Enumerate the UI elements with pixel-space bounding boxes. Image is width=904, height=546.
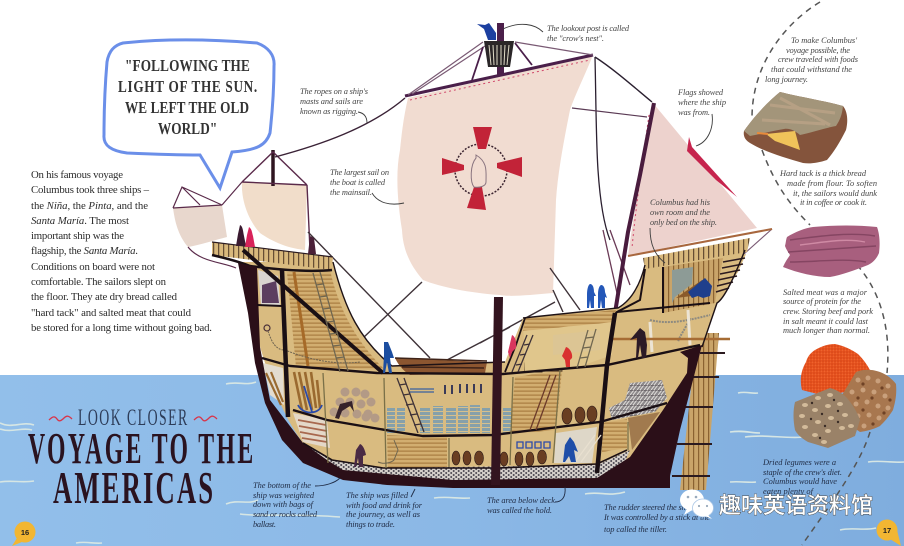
intro paragraph: the floor. They ate dry bread called	[31, 291, 178, 303]
caption: rudder: It was controlled by a stick at the	[603, 513, 710, 522]
second small sail	[242, 150, 310, 250]
caption: rudder: top called the tiller.	[604, 525, 667, 534]
hull interior	[240, 250, 745, 480]
caption: columbus room	[650, 198, 717, 263]
caption: mainsail	[330, 168, 404, 204]
caption: intro food: long journey.	[765, 75, 808, 84]
caption: hold: The area below deck	[487, 496, 555, 505]
main mast lower section	[491, 297, 503, 485]
room with blue sailor	[554, 427, 597, 463]
red squiggles	[49, 416, 217, 421]
intro paragraph: comfortable. The sailors slept on	[31, 276, 167, 288]
caption: crow's nest: the "crow's nest".	[547, 34, 604, 43]
black-eyed beans	[794, 388, 860, 448]
food: hard tack	[744, 92, 847, 163]
sail yard	[628, 229, 772, 256]
rear small sail	[173, 182, 242, 268]
caption: hard tack	[779, 169, 877, 207]
caption: flags	[677, 88, 726, 146]
caption: crow's nest	[503, 24, 630, 43]
page number 16	[12, 522, 36, 546]
caption: ballast: down with bags of	[253, 500, 315, 509]
caption: rigging: known as rigging.	[300, 107, 358, 116]
quote text: WORLD"	[158, 121, 217, 138]
two blue sailors on deck	[587, 284, 607, 308]
tiller bar	[612, 338, 730, 340]
flag	[687, 137, 737, 197]
caption: ballast	[253, 478, 340, 529]
caption: ballast: ship was weighted	[253, 491, 315, 500]
intro paragraph: be stored for a long time without going bad.	[31, 322, 212, 334]
caption: intro food: To make Columbus'	[791, 36, 857, 45]
aft storage cells	[258, 270, 360, 448]
intro paragraph: Santa María. The most	[31, 215, 129, 227]
barrels	[452, 406, 597, 466]
caption: legumes: Columbus would have	[763, 477, 837, 486]
intro paragraph: Columbus took three ships –	[31, 184, 150, 196]
caption: hard tack: Hard tack is a thick bread	[779, 169, 867, 178]
deck beams	[243, 250, 710, 473]
caption: rudder	[603, 503, 710, 534]
caption: intro food	[765, 36, 858, 84]
rigging ropes	[275, 42, 772, 360]
caption: legumes: staple of the crew's diet.	[763, 468, 842, 477]
aft castle planking	[287, 270, 385, 370]
lower planks	[330, 370, 660, 470]
food: salted meat	[783, 226, 880, 277]
caption: hard tack: it in coffee or cook it.	[800, 198, 867, 207]
caption: columbus room: only bed on the ship.	[650, 218, 717, 227]
caption: intro food: that could withstand the	[771, 65, 852, 74]
caption: salted meat: Salted meat was a major	[783, 288, 868, 297]
caption: ballast: The bottom of the	[253, 481, 311, 490]
voyage to the: VOYAGE TO THE	[28, 423, 253, 473]
caption: rudder: The rudder steered the ship.	[604, 503, 694, 512]
water casks, blue stacks	[387, 384, 511, 433]
caption: flags: where the ship	[678, 98, 726, 107]
caption: columbus room: own room and the	[650, 208, 710, 217]
caption: salted meat: source of protein for the	[783, 297, 861, 306]
caption: hard tack: made from flour. To soften	[787, 179, 877, 188]
ship hull	[212, 225, 772, 488]
caption: salted meat: much longer than normal.	[783, 326, 870, 335]
caption: columbus room: Columbus had his	[650, 198, 710, 207]
brown beans	[842, 370, 896, 432]
quote text: LIGHT OF THE SUN.	[118, 79, 257, 96]
sailors	[236, 225, 712, 467]
caption: food and drink: The ship was filled	[346, 491, 409, 500]
cargo sacks and worker	[330, 388, 380, 422]
captain cabin room	[663, 258, 723, 313]
caption: hard tack: it, the sailors would dunk	[793, 189, 877, 198]
caption: mainsail: The largest sail on	[330, 168, 389, 177]
forward deck room walls	[523, 310, 616, 372]
ballast stones	[303, 443, 630, 481]
look closer: LOOK CLOSER	[78, 406, 187, 431]
speech bubble	[104, 40, 274, 188]
caption: legumes	[762, 458, 842, 496]
caption: hold: was called the hold.	[487, 506, 552, 515]
intro paragraph: Conditions on board were not	[31, 261, 155, 273]
caption: rigging: The ropes on a ship's	[300, 87, 368, 96]
icon: lookout sailor	[477, 23, 496, 40]
crates on deck	[525, 349, 562, 372]
aft deck rail	[212, 242, 333, 270]
caption: hold	[487, 487, 565, 515]
red lentils	[801, 344, 871, 396]
caption: food and drink: with food and drink for	[346, 501, 423, 510]
intro paragraph: important ship was the	[31, 230, 124, 242]
caption: flags: was from.	[678, 108, 710, 117]
caption: intro food: voyage possible, the	[786, 46, 850, 55]
blue sailor by the boat	[383, 342, 394, 373]
caption: intro food: crew traveled with foods	[778, 55, 858, 64]
quote text	[118, 58, 257, 138]
mizzen triangular sail	[628, 103, 757, 256]
caption: flags: Flags showed	[677, 88, 724, 97]
food: dried legumes	[794, 344, 896, 448]
caption: mainsail: the boat is called	[330, 178, 386, 187]
quote text: "FOLLOWING THE	[125, 58, 250, 75]
caption: food and drink: the journey, as well as	[346, 510, 420, 519]
caption: mainsail: the mainsail.	[330, 188, 372, 197]
sheer line	[333, 250, 745, 366]
rudder	[672, 333, 725, 490]
watermark: 趣味英语资料馆	[719, 488, 873, 520]
caption: ballast: sand or rocks called	[253, 510, 318, 519]
caption: food and drink: things to trade.	[346, 520, 395, 529]
icon: chat bubbles	[680, 490, 714, 519]
lumber and anchor	[294, 372, 322, 413]
intro paragraph: On his famous voyage	[31, 169, 123, 181]
caption: food and drink	[346, 489, 423, 529]
page number 16: 16	[21, 528, 29, 537]
caption: legumes: eaten plenty of	[763, 487, 815, 496]
midship boat	[395, 358, 487, 375]
stack of grey crates	[609, 380, 667, 420]
emblem: red cross	[442, 127, 522, 210]
americas: AMERICAS	[53, 463, 213, 514]
hull dark aft	[238, 263, 702, 488]
caption: salted meat	[783, 288, 873, 335]
intro paragraph	[31, 169, 212, 334]
caption: ballast: ballast.	[253, 520, 276, 529]
intro paragraph: "hard tack" and salted meat that could	[31, 307, 192, 319]
intro paragraph: the Niña, the Pinta, and the	[31, 200, 148, 212]
dashed route line	[752, 2, 888, 545]
blue boxes	[517, 442, 550, 448]
stern window stripes	[717, 254, 746, 303]
red sailors	[508, 335, 516, 358]
caption: legumes: Dried legumes were a	[762, 458, 836, 467]
caption: salted meat: crew. Storing beef and pork	[783, 307, 873, 316]
crow's nest and main mast	[477, 23, 514, 75]
dark sailors	[630, 328, 647, 358]
sea background	[0, 375, 904, 546]
page number 17: 17	[883, 526, 891, 535]
intro paragraph: flagship, the Santa María.	[31, 245, 138, 257]
caption: crow's nest: The lookout post is called	[547, 24, 630, 33]
heading	[28, 406, 253, 514]
rope coils in cabin	[650, 315, 710, 342]
caption: salted meat: in salt meant it could last	[783, 317, 869, 326]
mainsail	[397, 55, 593, 296]
page number 17	[876, 520, 901, 546]
ladders	[313, 272, 601, 462]
bulkheads	[323, 370, 628, 468]
caption: rigging	[300, 87, 368, 123]
mizzen mast	[615, 103, 654, 313]
captain cabin top strip	[643, 238, 750, 269]
quote text: WE LEFT THE OLD	[125, 100, 249, 117]
caption: rigging: masts and sails are	[300, 97, 363, 106]
